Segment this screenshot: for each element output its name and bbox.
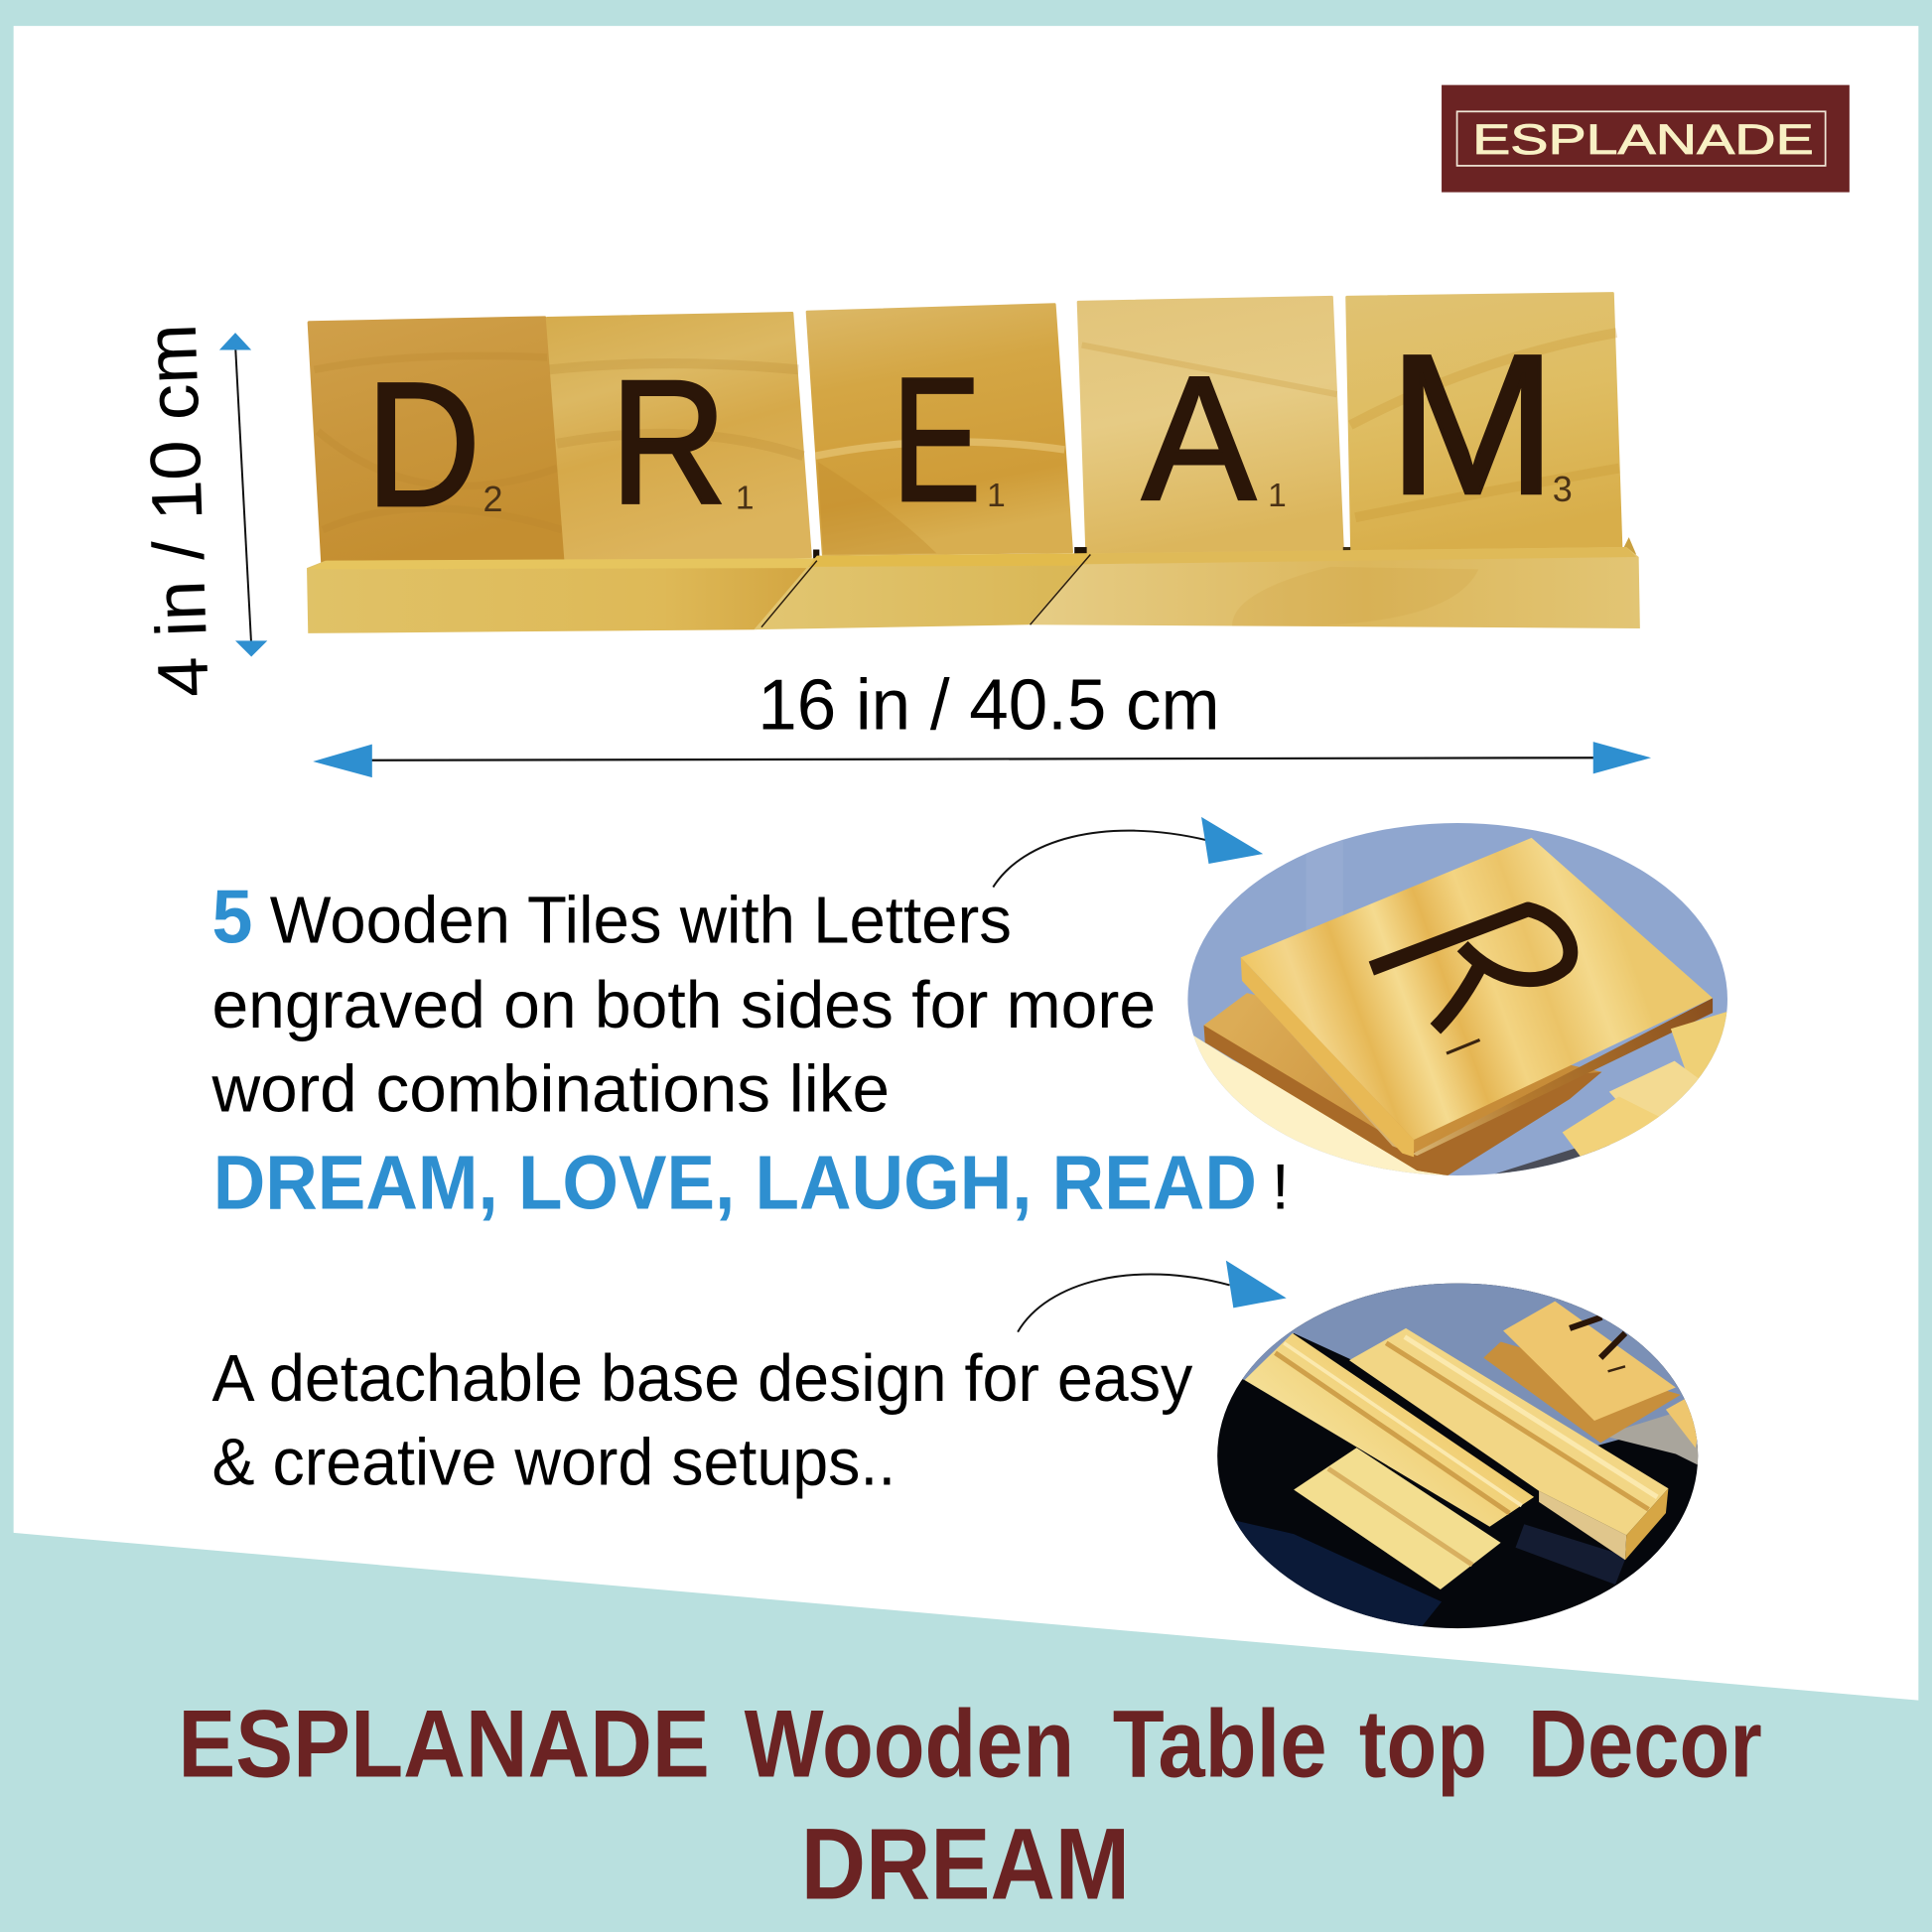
- lower tile: [1204, 993, 1601, 1175]
- tile M: [1346, 293, 1621, 554]
- curved arrow to tile photo: [993, 817, 1263, 888]
- text block: detachable base: A detachable base design for easy: [211, 1341, 1193, 1416]
- long base piece: [1349, 1328, 1668, 1535]
- curved arrow to base photo: [1018, 1261, 1287, 1332]
- tile E: [807, 305, 1072, 554]
- stacked tiles: [1483, 1342, 1681, 1443]
- main tile top: [1241, 838, 1713, 1140]
- text block: tiles description: DREAM, LOVE, LAUGH, READ: [213, 1140, 1257, 1225]
- tile R: R: [610, 343, 727, 540]
- photo: engraved R tile: [1182, 819, 1731, 1179]
- text block: detachable base: [211, 1341, 1193, 1499]
- tile R: 1: [736, 481, 755, 517]
- product photo: DREAM tiles on stand: [307, 293, 1640, 633]
- width dimension label: 16 in / 40.5 cm: [758, 666, 1220, 746]
- title: DREAM: [801, 1807, 1130, 1920]
- tile R: [547, 313, 811, 561]
- text block: tiles description: !: [1272, 1151, 1290, 1222]
- height dimension label: 4 in / 10 cm: [132, 323, 224, 698]
- width arrow: [313, 742, 1651, 777]
- title: [178, 1690, 1762, 1920]
- tile E: E: [893, 341, 981, 538]
- brand logo: ESPLANADE: [1472, 116, 1814, 163]
- engraved letter R: [1371, 909, 1571, 1029]
- title: Table: [1113, 1690, 1327, 1798]
- tile D: D: [366, 345, 481, 543]
- tile D: 2: [483, 479, 503, 519]
- text block: tiles description: Wooden Tiles with Letters: [270, 883, 1012, 957]
- photo: detachable base pieces: [1213, 1282, 1701, 1632]
- stand base: [307, 537, 1640, 633]
- text block: detachable base: & creative word setups..: [211, 1425, 896, 1499]
- main tile edge: [1241, 957, 1713, 1156]
- tile A: A: [1142, 340, 1256, 537]
- text block: tiles description: engraved on both sides for more: [211, 968, 1156, 1042]
- brand logo: [1442, 85, 1850, 193]
- title: ESPLANADE: [178, 1690, 710, 1798]
- title: Decor: [1528, 1690, 1762, 1798]
- title: top: [1359, 1690, 1487, 1798]
- tile M: M: [1389, 314, 1556, 535]
- text block: tiles description: 5: [211, 875, 252, 959]
- height arrow: [219, 333, 267, 656]
- side pieces: [1671, 1011, 1731, 1088]
- tile D: [310, 318, 566, 564]
- tile M: 3: [1553, 469, 1573, 509]
- title: Wooden: [745, 1690, 1074, 1798]
- second base piece: [1244, 1333, 1534, 1527]
- tile A: [1078, 297, 1343, 554]
- text block: tiles description: [210, 875, 1290, 1225]
- tile A: 1: [1268, 478, 1287, 514]
- short base piece: [1294, 1448, 1501, 1589]
- text block: tiles description: word combinations like: [210, 1051, 890, 1126]
- tile E: 1: [987, 478, 1006, 514]
